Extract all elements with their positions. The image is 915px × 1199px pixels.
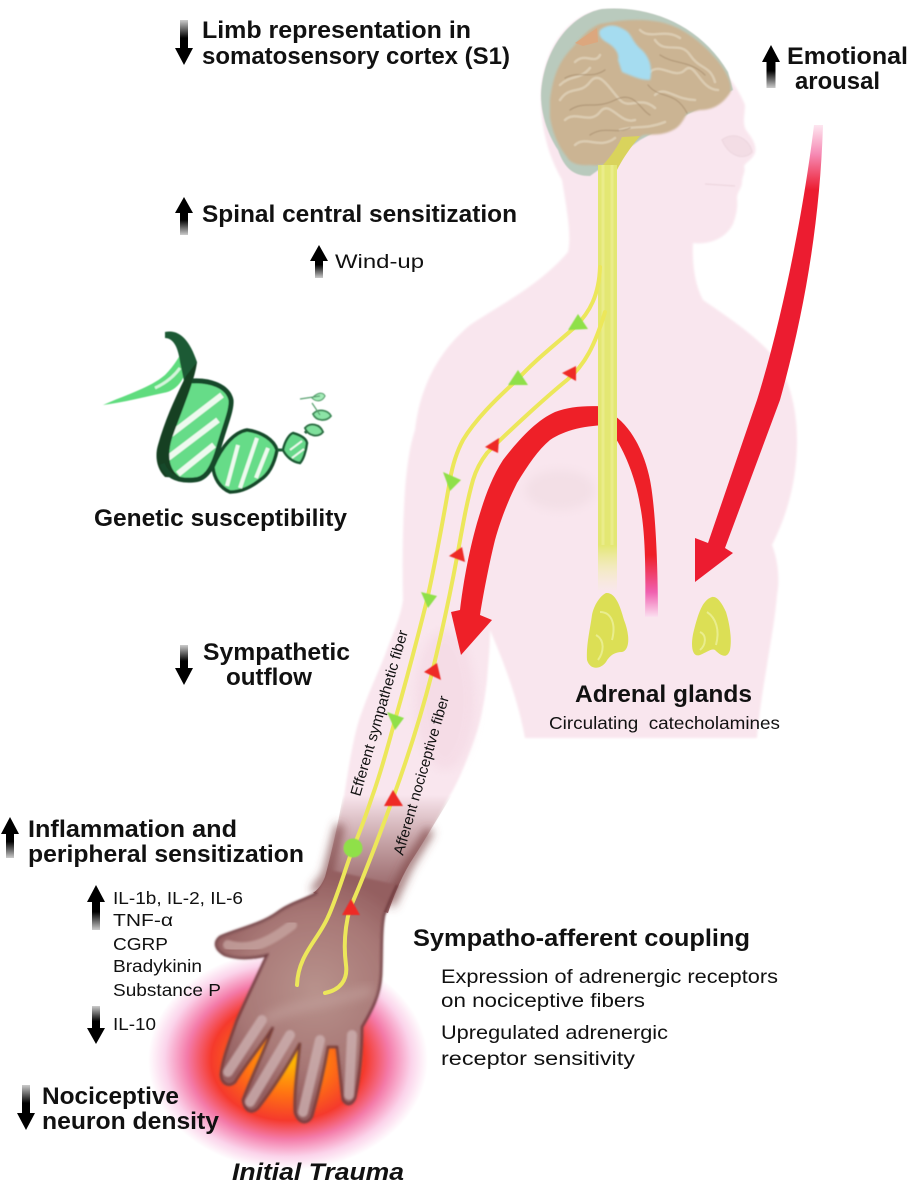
label: IL-10 bbox=[87, 1006, 156, 1044]
label: inflammation bbox=[1, 816, 304, 868]
spinal cord bbox=[598, 165, 617, 590]
afferent nociceptive fiber bbox=[325, 312, 605, 993]
label: nociceptive neuron density: neuron density bbox=[42, 1108, 220, 1135]
label: limb representation: Limb representation in bbox=[202, 17, 471, 44]
text block: sympatho-afferent coupling: on nociceptive fibers bbox=[441, 990, 645, 1012]
nose and lips shading bbox=[705, 136, 752, 186]
adrenal glands bbox=[587, 593, 731, 668]
label: adrenal glands: Circulating catecholamines bbox=[549, 713, 780, 733]
text block: sympatho-afferent coupling: Expression of adrenergic receptors bbox=[441, 966, 778, 988]
big red arrow: adrenal to arm bbox=[451, 406, 658, 655]
head and brain bbox=[541, 9, 733, 176]
label: emotional arousal bbox=[762, 43, 908, 95]
label: wind-up: Wind-up bbox=[335, 251, 424, 273]
list: raised mediators: Substance P bbox=[113, 980, 221, 1000]
human body silhouette bbox=[313, 9, 797, 913]
brain bbox=[550, 20, 731, 165]
third lobe bbox=[283, 433, 307, 463]
main lobe bbox=[160, 380, 232, 480]
brain folds bbox=[560, 30, 718, 145]
brainstem bbox=[598, 136, 640, 170]
list: raised mediators bbox=[87, 885, 243, 1000]
label: adrenal glands bbox=[549, 681, 780, 733]
list: raised mediators: Bradykinin bbox=[113, 956, 202, 976]
small lobes bbox=[305, 425, 323, 435]
label: sympathetic outflow: outflow bbox=[226, 664, 312, 691]
label: limb representation bbox=[175, 17, 510, 70]
label: sympathetic outflow bbox=[175, 639, 350, 691]
chest shading bbox=[525, 470, 595, 510]
label: afferent nociceptive fiber: Afferent nociceptive fiber bbox=[391, 694, 453, 857]
label: IL-10: IL-10 bbox=[113, 1014, 156, 1034]
text block: sympatho-afferent coupling: Sympatho-afferent coupling bbox=[413, 925, 750, 952]
label: spinal central sensitization bbox=[175, 197, 517, 235]
label: adrenal glands: Adrenal glands bbox=[575, 681, 752, 708]
text block: sympatho-afferent coupling bbox=[413, 925, 778, 1070]
orange cortex patch bbox=[575, 28, 598, 46]
label: efferent sympathetic fiber: Efferent sympathetic fiber bbox=[348, 628, 412, 798]
label: inflammation: Inflammation and bbox=[28, 816, 237, 843]
red signal markers bbox=[342, 366, 576, 915]
text block: sympatho-afferent coupling: receptor sensitivity bbox=[441, 1048, 635, 1070]
label: limb representation: somatosensory cortex (S1) bbox=[202, 43, 510, 70]
list: raised mediators: TNF-α bbox=[113, 910, 173, 930]
forearm shading bbox=[313, 795, 452, 913]
label: wind-up bbox=[310, 245, 424, 278]
label: emotional arousal: Emotional bbox=[787, 43, 908, 70]
upper ribbon bbox=[103, 350, 192, 405]
trauma glow bbox=[148, 950, 428, 1170]
efferent sympathetic fiber bbox=[297, 267, 600, 985]
skull cap bbox=[541, 9, 733, 176]
hand bbox=[216, 870, 397, 1122]
list: raised mediators: CGRP bbox=[113, 934, 168, 954]
label: sympathetic outflow: Sympathetic bbox=[203, 639, 350, 666]
label: emotional arousal: arousal bbox=[795, 68, 880, 95]
label: initial trauma: Initial Trauma bbox=[232, 1159, 404, 1186]
label: inflammation: peripheral sensitization bbox=[28, 841, 304, 868]
label: spinal central sensitization: Spinal central sensitization bbox=[202, 201, 517, 228]
list: raised mediators: IL-1b, IL-2, IL-6 bbox=[113, 888, 243, 908]
label: nociceptive neuron density bbox=[17, 1083, 220, 1135]
text block: sympatho-afferent coupling: Upregulated adrenergic bbox=[441, 1022, 668, 1044]
emotional arousal red arrow bbox=[695, 125, 823, 582]
label: nociceptive neuron density: Nociceptive bbox=[42, 1083, 179, 1110]
DNA helix icon bbox=[103, 331, 331, 492]
green signal markers bbox=[344, 314, 588, 858]
label: genetic susceptibility: Genetic susceptibility bbox=[94, 505, 348, 532]
S1 cortex blue patch bbox=[599, 26, 651, 80]
second lobe bbox=[213, 430, 277, 492]
